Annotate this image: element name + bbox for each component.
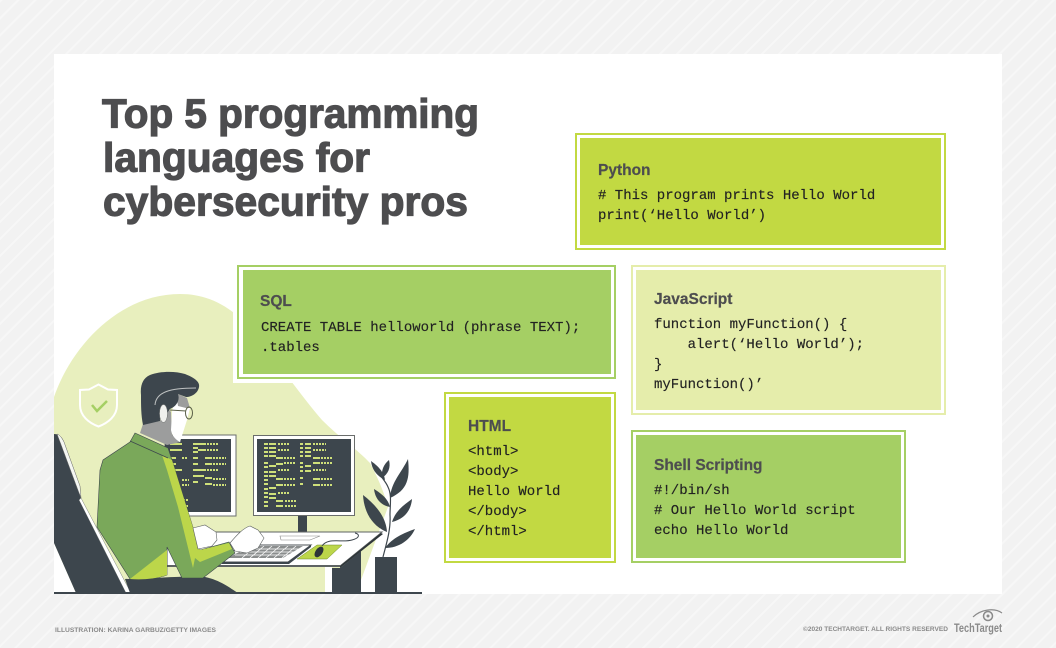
left monitor (165, 435, 236, 516)
panel: Shell Scripting: # Our Hello World script (654, 503, 856, 519)
panel: Shell Scripting (632, 431, 905, 562)
ear (160, 404, 168, 422)
illustration: programmer at desk (54, 294, 422, 594)
forehead shadow (176, 393, 190, 408)
panel: SQL: CREATE TABLE helloworld (phrase TEXT); (261, 320, 580, 336)
face (171, 396, 190, 442)
title (102, 90, 479, 224)
panel: Shell Scripting: #!/bin/sh (654, 483, 730, 499)
title: Top 5 programming (102, 90, 479, 136)
monitor stand (298, 516, 307, 534)
panel: SQL: .tables (261, 340, 320, 356)
copyright: ©2020 TECHTARGET. ALL RIGHTS RESERVED (803, 625, 948, 633)
panel: JavaScript: JavaScript (654, 291, 732, 308)
potted plant (363, 459, 415, 593)
panel: HTML: Hello World (468, 484, 560, 500)
title: cybersecurity pros (103, 178, 468, 224)
panel: JavaScript: myFunction()’ (654, 377, 763, 393)
TechTarget logo: TechTarget (954, 623, 1002, 635)
neck (140, 405, 181, 445)
shirt (97, 433, 235, 579)
panel: HTML: <body> (468, 464, 518, 480)
panel: JavaScript: alert(‘Hello World’); (654, 337, 864, 353)
background blob (54, 294, 388, 593)
illustration credit: ILLUSTRATION: KARINA GARBUZ/GETTY IMAGES (55, 627, 217, 634)
panel: Python (576, 134, 945, 249)
panel: HTML (445, 393, 615, 562)
glasses (170, 407, 192, 419)
panel: SQL: SQL (260, 293, 292, 310)
panel: Python: Python (598, 162, 651, 179)
panel: HTML: </body> (468, 504, 527, 520)
hair (141, 372, 199, 425)
panel: JavaScript (632, 266, 945, 414)
title: languages for (103, 134, 370, 180)
panel: HTML: HTML (468, 418, 511, 435)
ground line (54, 592, 422, 594)
TechTarget logo (954, 610, 1002, 635)
right monitor (254, 436, 354, 534)
panel: JavaScript: } (654, 357, 662, 373)
chair (54, 434, 131, 593)
panel: Python: print(‘Hello World’) (598, 208, 766, 224)
panel: Shell Scripting: Shell Scripting (654, 457, 763, 474)
mouse and mat (297, 533, 358, 559)
white content panel (54, 54, 1002, 594)
hair highlight (155, 388, 196, 405)
icon: security shield (80, 384, 117, 426)
keyboard (222, 545, 311, 564)
hands (193, 525, 264, 553)
pants (125, 576, 238, 593)
panel: Shell Scripting: echo Hello World (654, 523, 788, 539)
panel: Python: # This program prints Hello World (598, 188, 875, 204)
panel: SQL (233, 261, 620, 383)
panel: HTML: <html> (468, 444, 518, 460)
panel: JavaScript: function myFunction() { (654, 317, 847, 333)
desk (167, 532, 383, 593)
panel: HTML: </html> (468, 524, 527, 540)
